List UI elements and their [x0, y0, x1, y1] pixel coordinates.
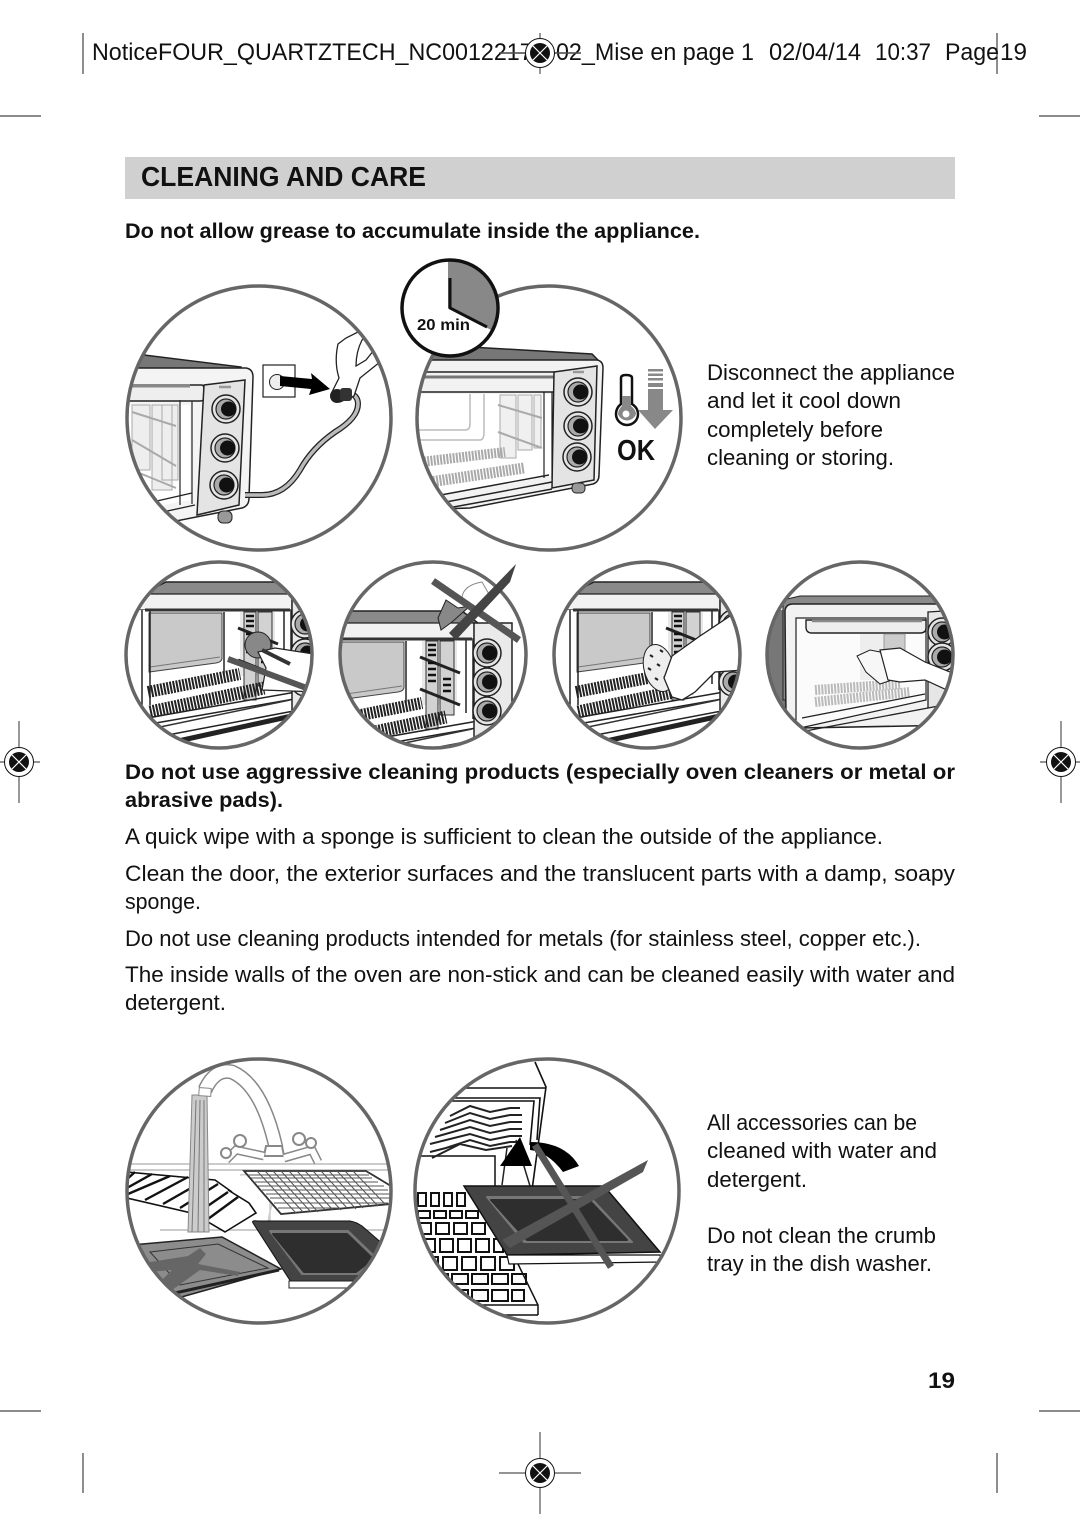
icon: thermometer cooling with OK: OK: [617, 435, 655, 467]
header slug text: NoticeFOUR_QUARTZTECH_NC0012217X-02_Mise en page 1: [92, 39, 754, 66]
illustration: washing accessories under tap: [120, 1059, 395, 1323]
text: accessories cleaning: detergent.: [707, 1167, 807, 1192]
cleaning instruction paragraphs: detergent.: [125, 990, 226, 1015]
illustration: no metal scraper inside oven: [120, 562, 330, 748]
text: disconnect instructions: and let it cool down: [707, 388, 901, 413]
page number: 19: [928, 1368, 955, 1393]
text: accessories cleaning: Do not clean the crumb: [707, 1223, 936, 1248]
illustration: oven cooling down: [410, 286, 681, 550]
cleaning instruction paragraphs: The inside walls of the oven are non-stick and can be cleaned easily with water and: [125, 962, 955, 987]
header slug text: Page: [945, 39, 999, 66]
illustration: unplugging the oven: [120, 286, 391, 550]
header slug text: 10:37: [875, 39, 931, 66]
header slug text: 19: [1000, 39, 1027, 66]
cleaning instruction paragraphs: [125, 824, 955, 1015]
text: accessories cleaning: cleaned with water and: [707, 1138, 937, 1163]
title banner: CLEANING AND CARE: [141, 161, 426, 192]
header slug text: 02/04/14: [769, 39, 861, 66]
illustration: crumb tray not for dishwasher: [410, 1059, 679, 1323]
text: accessories cleaning: All accessories can be: [707, 1110, 917, 1135]
grease warning heading: Do not allow grease to accumulate inside the appliance.: [125, 220, 700, 243]
icon: thermometer cooling with OK: [616, 369, 673, 467]
illustration: wiping oven door with cloth: [760, 562, 960, 750]
text: accessories cleaning: [707, 1110, 937, 1276]
warning about aggressive cleaning products: [125, 761, 955, 812]
illustration: wiping inside with sponge: [548, 562, 758, 748]
warning about aggressive cleaning products: Do not use aggressive cleaning products (especially oven cleaners or metal or: [125, 761, 955, 784]
icon: 20 minute timer: 20 min: [417, 317, 470, 334]
title banner: [125, 157, 955, 199]
warning about aggressive cleaning products: abrasive pads).: [125, 789, 283, 812]
cleaning instruction paragraphs: Do not use cleaning products intended for metals (for stainless steel, copper etc.).: [125, 926, 921, 951]
cleaning instruction paragraphs: Clean the door, the exterior surfaces and the translucent parts with a damp, soapy: [125, 861, 955, 886]
cleaning instruction paragraphs: A quick wipe with a sponge is sufficient to clean the outside of the appliance.: [125, 824, 883, 849]
icon: 20 minute timer: [402, 260, 498, 356]
text: disconnect instructions: cleaning or storing.: [707, 445, 894, 470]
text: disconnect instructions: completely before: [707, 417, 883, 442]
text: disconnect instructions: [707, 360, 955, 470]
text: accessories cleaning: tray in the dish washer.: [707, 1251, 932, 1276]
cleaning instruction paragraphs: sponge.: [125, 889, 201, 914]
text: disconnect instructions: Disconnect the appliance: [707, 360, 955, 385]
illustration: no spraying of oven cleaner: [338, 560, 528, 750]
